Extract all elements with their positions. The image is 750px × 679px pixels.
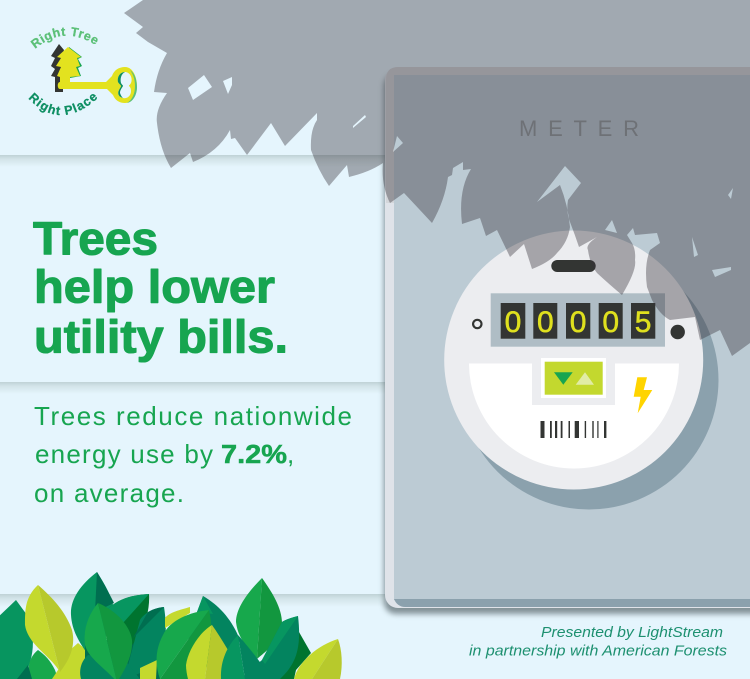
heading: Trees xyxy=(33,212,158,264)
foliage cluster xyxy=(0,572,342,679)
body text: energy use by xyxy=(35,439,213,469)
leaf: teal right of center xyxy=(125,607,166,677)
dial face xyxy=(444,230,703,490)
leaf: yellow center xyxy=(186,625,228,679)
logo key xyxy=(58,67,137,103)
body text: 7.2% xyxy=(221,439,287,469)
leaf: teal right xyxy=(240,616,299,679)
logo dark tree xyxy=(51,44,64,92)
logo arc path bottom xyxy=(28,94,102,115)
leaf: yellow bit xyxy=(140,660,157,679)
leaf: dark green right xyxy=(270,625,311,679)
icon: lightning bolt xyxy=(634,377,652,413)
logo yellow tree xyxy=(56,47,81,84)
barcode xyxy=(540,421,606,438)
digit counter: 00005: 0 xyxy=(505,306,521,339)
white lower face xyxy=(469,364,679,469)
leaf: large green xyxy=(157,610,212,679)
leaf: right yellow xyxy=(294,639,342,679)
leaf: large yellow xyxy=(25,585,73,672)
logo wordmark bottom: Right Place xyxy=(28,92,97,116)
dial shadow xyxy=(460,250,718,510)
body text: on average. xyxy=(34,478,184,508)
credit text xyxy=(469,624,728,660)
tree canopy shadow xyxy=(124,0,750,356)
heading: help lower xyxy=(34,260,275,312)
leaf: teal center xyxy=(221,635,280,679)
right screw xyxy=(670,325,685,339)
heading xyxy=(33,212,288,362)
body text: , xyxy=(287,439,294,469)
body text xyxy=(34,401,352,508)
leaf: lower teal stub xyxy=(80,655,140,679)
digit counter: 00005 xyxy=(491,293,665,347)
leaf: top green xyxy=(236,578,282,659)
heading: utility bills. xyxy=(34,310,288,362)
leaf: yellow back xyxy=(165,607,190,628)
leaf: dark green upper xyxy=(105,594,149,650)
meter dial xyxy=(444,230,718,510)
indicator display xyxy=(532,358,615,405)
logo: Right Tree Right Place xyxy=(28,27,137,116)
digit counter: 00005: 5 xyxy=(635,306,651,339)
leaf: dark sliver xyxy=(17,665,32,679)
body text: Trees reduce nationwide xyxy=(34,401,352,431)
left screw xyxy=(473,320,481,328)
credit text: in partnership with American Forests xyxy=(469,642,728,660)
leaf: far left teal xyxy=(0,600,33,679)
logo wordmark top: Right Tree xyxy=(30,27,98,49)
foliage base fill xyxy=(85,640,160,679)
leaf: tall dark teal xyxy=(185,596,240,679)
digit counter: 00005: 0 xyxy=(602,306,619,339)
leaf: yellow stalk xyxy=(52,643,90,679)
panel: utility meter housing xyxy=(384,67,750,614)
digit counter: 00005: 0 xyxy=(537,306,554,339)
credit text: Presented by LightStream xyxy=(541,624,723,641)
logo arc path top xyxy=(35,36,97,49)
meter label: METER xyxy=(519,116,639,141)
digit counter: 00005: 0 xyxy=(570,306,586,339)
top slot xyxy=(551,260,596,272)
logo green tree edge xyxy=(62,47,82,82)
leaf: central green xyxy=(85,603,132,679)
leaf: small lower left xyxy=(29,650,58,679)
leaf: tall teal xyxy=(71,572,115,660)
